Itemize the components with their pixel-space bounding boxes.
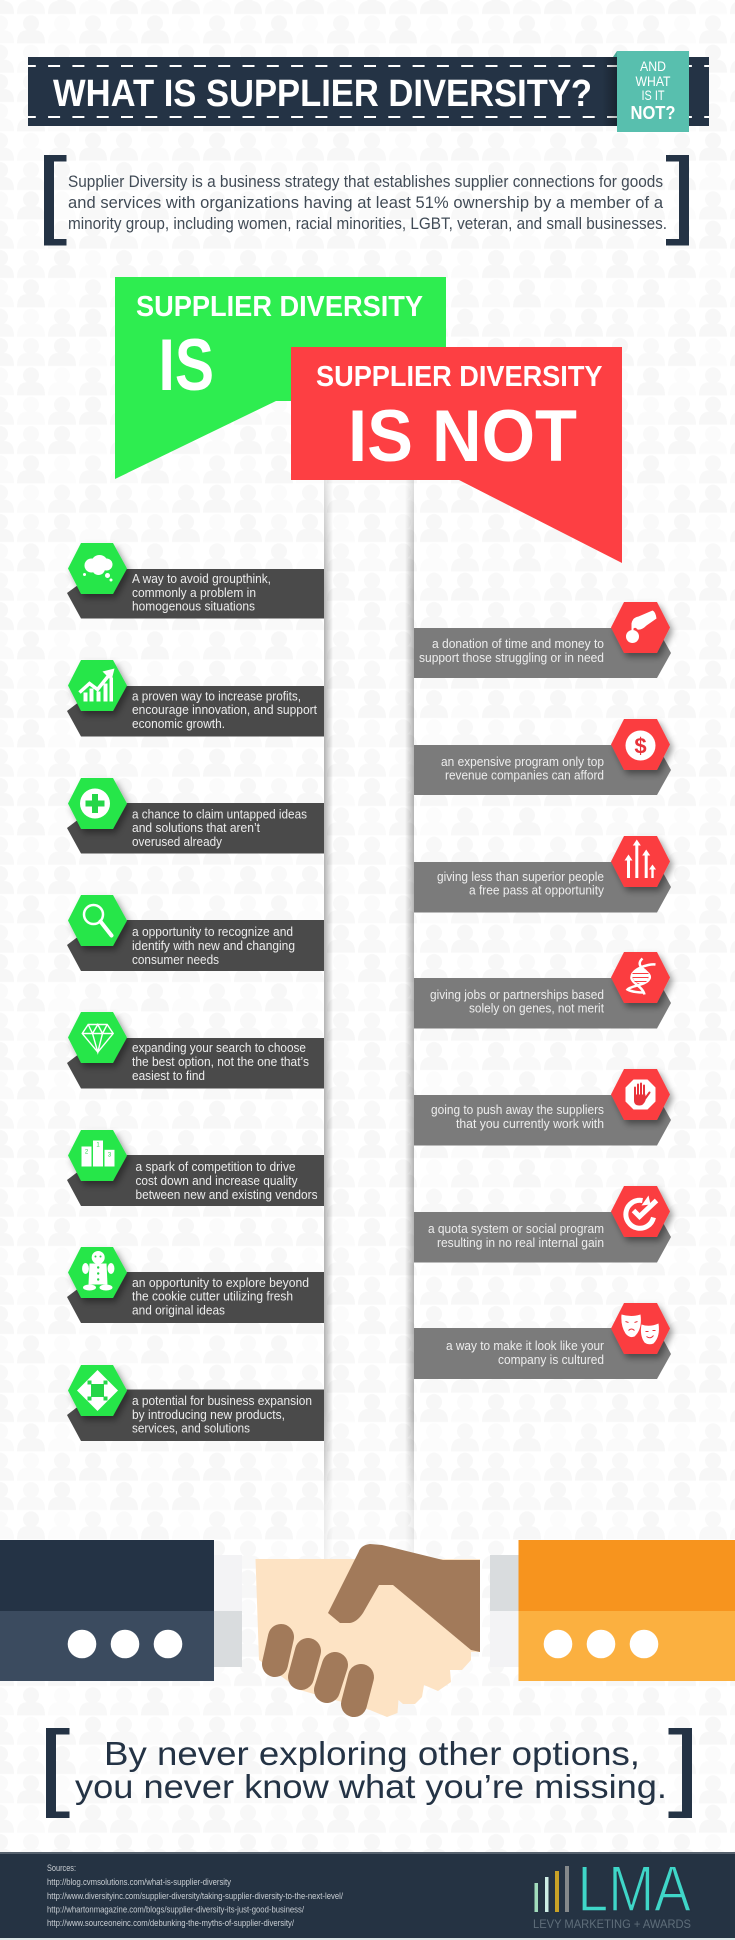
title: WHAT IS SUPPLIER DIVERSITY? <box>53 73 592 115</box>
item: increase profits <box>67 660 324 736</box>
definition text: Supplier Diversity is a business strategy that establishes supplier connections for goods <box>68 173 663 191</box>
item: cookie cutter: the cookie cutter utilizing fresh <box>132 1290 293 1304</box>
icon: hand with coin <box>626 610 656 643</box>
item: donation: a donation of time and money to <box>432 637 604 651</box>
item: cookie cutter: an opportunity to explore beyond <box>132 1276 309 1290</box>
icon: podium: 3 <box>108 1152 112 1158</box>
item: spark of competition <box>67 1130 324 1206</box>
logo: LMA: LEVY MARKETING + AWARDS <box>533 1917 691 1931</box>
item: push away suppliers: that you currently work with <box>456 1117 604 1131</box>
item: increase profits: encourage innovation, and support <box>132 703 317 717</box>
item: untapped ideas: and solutions that aren’t <box>132 821 261 835</box>
banner: supplier diversity is not <box>291 347 622 563</box>
icon: magnifier <box>84 905 112 936</box>
icon: stop hand <box>626 1080 656 1110</box>
central channel <box>324 480 414 1560</box>
icon: podium: 1 <box>96 1142 100 1148</box>
item: quota system: resulting in no real internal gain <box>437 1236 604 1250</box>
item: genes <box>414 952 671 1028</box>
icon: expansion diamond <box>77 1370 118 1411</box>
item: cultured: a way to make it look like your <box>446 1339 604 1353</box>
teal tag: and what is it not <box>613 51 689 132</box>
sources list: http://whartonmagazine.com/blogs/supplier-diversity-its-just-good-business/ <box>47 1904 304 1916</box>
banner: supplier diversity is not: SUPPLIER DIVERSITY <box>316 361 602 393</box>
teal tag: and what is it not: AND <box>640 58 666 74</box>
teal tag: and what is it not: WHAT <box>636 73 671 89</box>
icon: podium: 2 <box>85 1150 89 1156</box>
item: best option: expanding your search to choose <box>132 1041 306 1055</box>
banner: supplier diversity is: SUPPLIER DIVERSITY <box>136 291 423 323</box>
closing statement: you never know what you’re missing. <box>75 1768 667 1805</box>
item: genes: solely on genes, not merit <box>469 1002 604 1016</box>
item: consumer needs: a opportunity to recognize and <box>132 925 293 939</box>
banner: supplier diversity is not: IS NOT <box>348 396 577 477</box>
item: avoid groupthink: commonly a problem in <box>132 586 256 600</box>
item: best option <box>67 1012 324 1088</box>
item: expensive program <box>414 719 671 795</box>
item: consumer needs <box>67 895 324 971</box>
footer <box>0 1852 735 1940</box>
closing statement <box>46 1728 692 1818</box>
logo: LMA: LMA <box>578 1852 692 1925</box>
item: cookie cutter <box>67 1247 324 1323</box>
item: best option: the best option, not the one that’s <box>132 1055 309 1069</box>
item: free pass <box>414 836 671 912</box>
closing statement: By never exploring other options, <box>104 1735 640 1772</box>
definition text: minority group, including women, racial minorities, LGBT, veteran, and small businesses. <box>68 215 667 233</box>
panel: title banner <box>28 51 709 132</box>
item: avoid groupthink: A way to avoid groupthink, <box>132 572 271 586</box>
banner: supplier diversity is <box>115 277 446 479</box>
item: business expansion: a potential for business expansion <box>132 1394 312 1408</box>
item: cultured: company is cultured <box>498 1353 604 1367</box>
sources list: http://blog.cvmsolutions.com/what-is-supplier-diversity <box>47 1877 231 1888</box>
item: increase profits: economic growth. <box>132 717 225 731</box>
item: free pass: a free pass at opportunity <box>469 884 605 898</box>
item: push away suppliers: going to push away the suppliers <box>431 1103 604 1117</box>
teal tag: and what is it not: IS IT <box>642 87 665 103</box>
item: consumer needs: identify with new and changing <box>132 939 295 953</box>
icon: gingerbread man <box>82 1251 114 1290</box>
sources list: http://www.sourceoneinc.com/debunking-the-myths-of-supplier-diversity/ <box>47 1918 294 1929</box>
item: donation: support those struggling or in need <box>419 651 604 665</box>
item: business expansion <box>67 1365 324 1441</box>
item: push away suppliers <box>414 1069 671 1146</box>
item: increase profits: a proven way to increase profits, <box>132 690 301 704</box>
item: spark of competition: cost down and increase quality <box>136 1174 298 1188</box>
item: business expansion: by introducing new products, <box>132 1408 285 1422</box>
item: untapped ideas <box>67 778 324 854</box>
item: genes: giving jobs or partnerships based <box>430 988 604 1002</box>
illustration: right sleeve <box>490 1540 735 1681</box>
panel: definition <box>44 155 689 246</box>
definition text: and services with organizations having at least 51% ownership by a member of a <box>68 194 664 212</box>
item: avoid groupthink <box>67 543 324 618</box>
item: avoid groupthink: homogenous situations <box>132 600 255 614</box>
item: business expansion: services, and solutions <box>132 1422 250 1436</box>
icon: theatre masks <box>621 1314 659 1344</box>
item: spark of competition: between new and existing vendors <box>136 1188 318 1202</box>
item: untapped ideas: overused already <box>132 835 223 849</box>
logo: LMA <box>533 1852 692 1931</box>
item: donation <box>414 602 671 678</box>
definition text <box>68 173 667 233</box>
item: quota system <box>414 1186 671 1262</box>
icon: rising chart <box>80 668 114 702</box>
illustration: handshake <box>256 1544 480 1717</box>
teal tag: and what is it not: NOT? <box>630 103 676 123</box>
item: cookie cutter: and original ideas <box>132 1304 225 1318</box>
item: best option: easiest to find <box>132 1069 205 1083</box>
item: spark of competition: a spark of competition to drive <box>136 1160 296 1174</box>
item: free pass: giving less than superior people <box>437 870 604 884</box>
item: quota system: a quota system or social program <box>428 1222 604 1236</box>
icon: plus <box>80 788 110 818</box>
icon: dollar coin <box>626 730 656 760</box>
item: cultured <box>414 1303 671 1379</box>
sources list: Sources: <box>47 1863 76 1874</box>
icon: check with circular arrow <box>626 1196 656 1228</box>
sources list: http://www.diversityinc.com/supplier-diversity/taking-supplier-diversity-to-the-next-level/ <box>47 1891 343 1902</box>
illustration: left sleeve <box>0 1540 242 1681</box>
icon: up arrows <box>624 840 656 878</box>
banner: supplier diversity is: IS <box>158 325 214 406</box>
item: expensive program: revenue companies can afford <box>445 768 604 782</box>
item: expensive program: an expensive program only top <box>441 755 604 769</box>
sources list <box>47 1863 343 1929</box>
icon: thought cloud <box>83 555 112 582</box>
item: untapped ideas: a chance to claim untapped ideas <box>132 808 307 822</box>
icon: dna helix <box>628 958 656 994</box>
icon: podium <box>82 1140 114 1166</box>
icon: diamond <box>82 1024 113 1052</box>
icon: dollar coin: $ <box>634 734 647 758</box>
item: consumer needs: consumer needs <box>132 953 219 967</box>
